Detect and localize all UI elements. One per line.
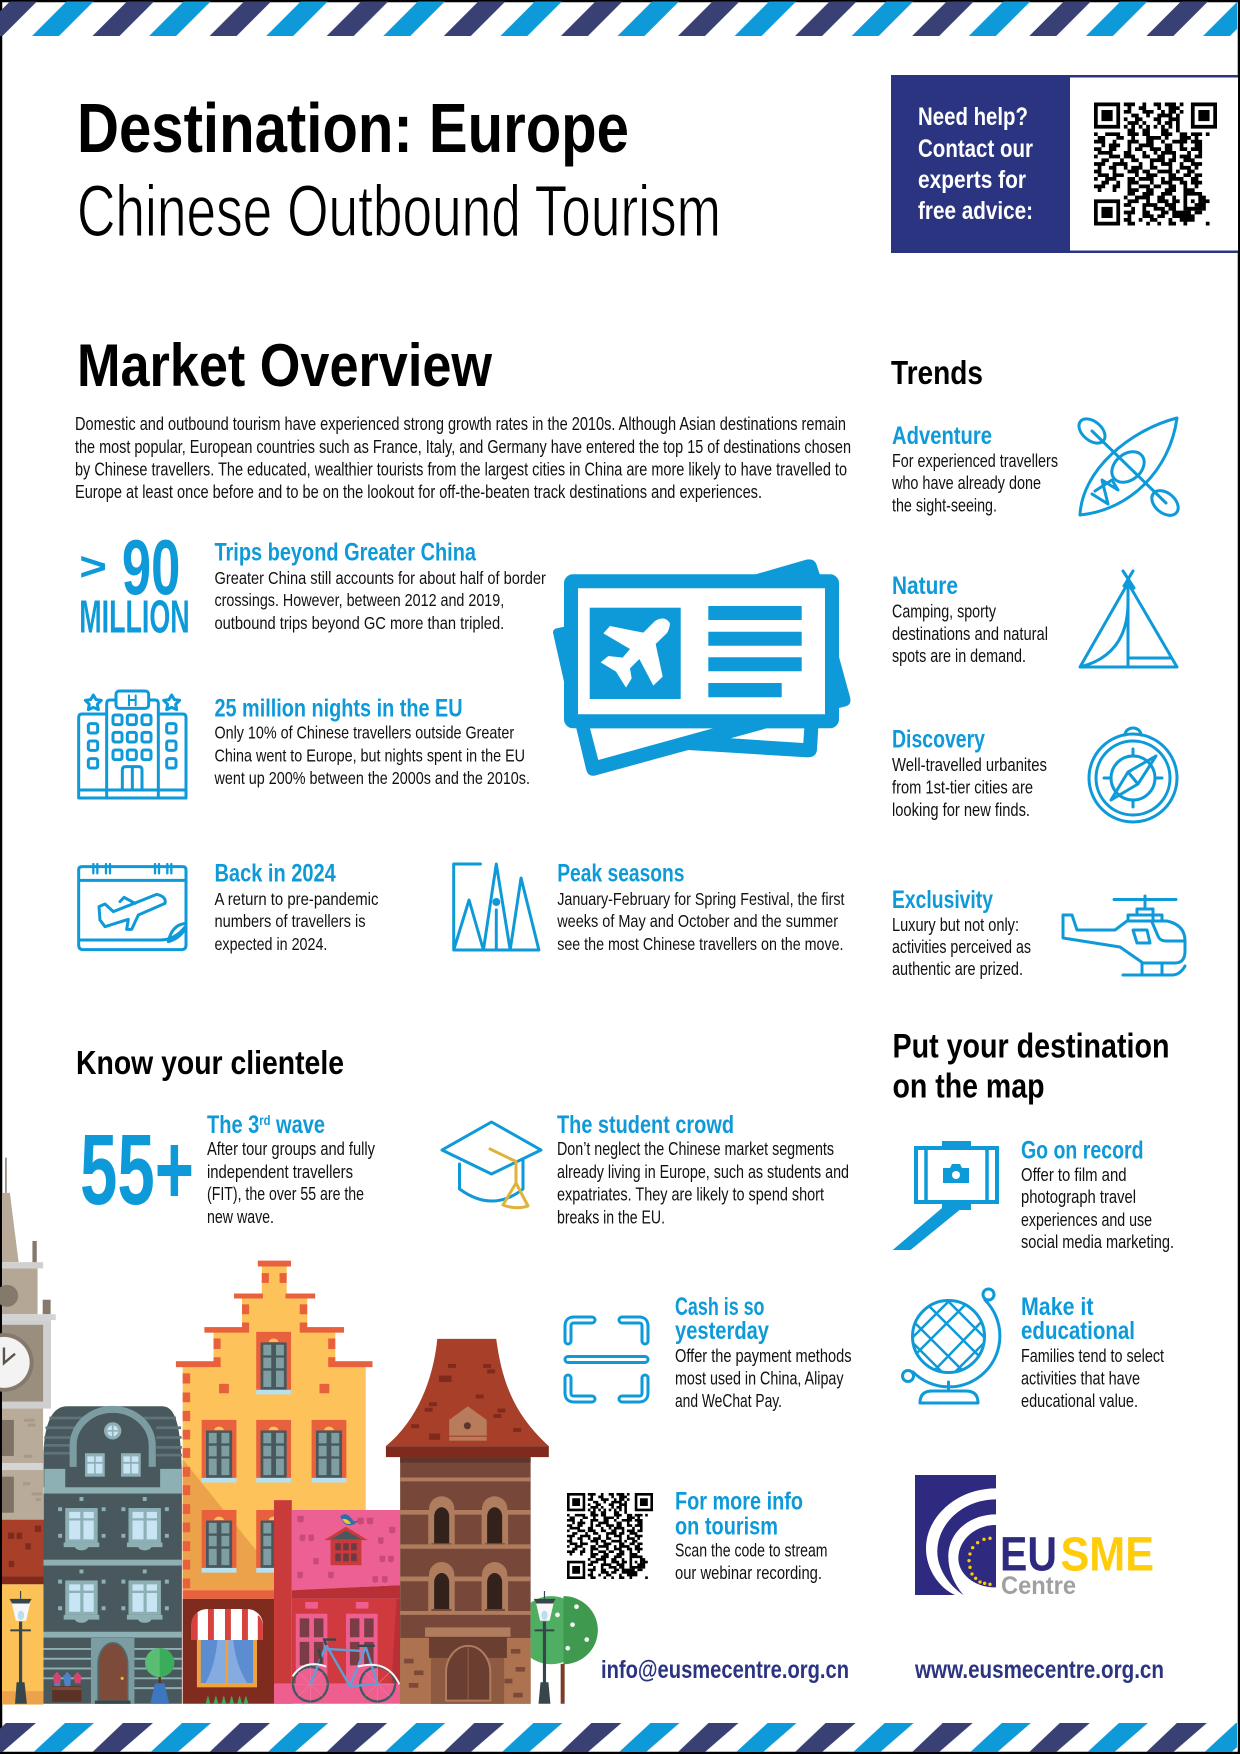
text block: 25 million nights in the EU: Only 10% of Chinese travellers outside Greater: [214, 722, 514, 743]
text block: make it educational: [1021, 1293, 1164, 1411]
title: Destination: Europe: [77, 89, 629, 167]
text block: for more info on tourism: our webinar recording.: [675, 1563, 822, 1583]
tall yellow house: [176, 1261, 372, 1704]
text block: back in 2024: Back in 2024: [214, 859, 336, 888]
airmail stripes bottom: [0, 1723, 1237, 1752]
text block: discovery: Discovery: [892, 726, 985, 754]
stat: more than 90 million: MILLION: [79, 591, 190, 643]
text block: discovery: [892, 726, 1047, 820]
text block: adventure: who have already done: [891, 473, 1041, 493]
icon: helicopter: [1063, 896, 1185, 975]
text block: 25 million nights in the EU: China went to Europe, but nights spent in the EU: [214, 745, 525, 766]
heading: market overview: Market Overview: [77, 332, 492, 399]
text block: exclusivity: authentic are prized.: [892, 959, 1023, 979]
text block: for more info on tourism: [675, 1488, 828, 1583]
text block: 25 million nights in the EU: [214, 694, 530, 788]
text block: back in 2024: expected in 2024.: [214, 934, 327, 954]
icon: graduation cap: [442, 1122, 541, 1208]
text block: the 3rd wave: (FIT), the over 55 are the: [207, 1184, 364, 1204]
text block: back in 2024: [214, 859, 378, 954]
text block: for more info on tourism: on tourism: [675, 1512, 778, 1540]
street lamp left: [9, 1591, 32, 1704]
text block: go on record: Offer to film and: [1021, 1165, 1126, 1185]
airmail stripes top: [0, 2, 1237, 36]
text block: adventure: the sight-seeing.: [892, 496, 997, 516]
text block: make it educational: educational: [1021, 1317, 1135, 1345]
text block: cash is so yesterday: Offer the payment methods: [675, 1346, 852, 1366]
contact: email: info@eusmecentre.org.cn: [601, 1656, 849, 1684]
title: Chinese Outbound Tourism: [77, 172, 721, 252]
text block: cash is so yesterday: yesterday: [675, 1317, 769, 1345]
text block: the 3rd wave: [207, 1111, 375, 1227]
text block: trips beyond greater china: Greater China still accounts for about half of border: [214, 568, 546, 588]
text block: peak seasons: January-February for Spring Festival, the first: [557, 889, 844, 909]
panel: contact help box: experts for: [918, 166, 1026, 194]
text block: 25 million nights in the EU: went up 200% between the 2000s and the 2010s.: [214, 768, 530, 788]
text block: exclusivity: [892, 886, 1031, 979]
panel: contact help box: Contact our: [918, 135, 1033, 163]
text block: go on record: [1021, 1136, 1174, 1252]
text block: the 3rd wave: The 3: [207, 1111, 272, 1139]
text block: cash is so yesterday: [675, 1293, 852, 1411]
text block: the 3rd wave: independent travellers: [207, 1162, 353, 1182]
text block: exclusivity: Luxury but not only:: [892, 915, 1019, 935]
stat: 55 plus: 55+: [80, 1114, 194, 1226]
text block: market overview intro: Domestic and outbound tourism have experienced strong growth rates in the 2010s. Although Asian destinations remain: [75, 414, 846, 434]
heading: know your clientele: Know your clientele: [76, 1044, 344, 1081]
text block: cash is so yesterday: most used in China, Alipay: [675, 1368, 844, 1388]
logo: EUSME Centre: SME: [1060, 1528, 1154, 1582]
text block: the 3rd wave: wave: [270, 1111, 325, 1139]
logo: EUSME Centre: EU: [1000, 1528, 1057, 1582]
text block: exclusivity: activities perceived as: [892, 937, 1031, 957]
text block: peak seasons: see the most Chinese travellers on the move.: [557, 934, 843, 954]
text block: adventure: [891, 422, 1058, 516]
panel: contact help box: Need help?: [918, 103, 1028, 131]
heading: put your destination on the map: [892, 1028, 1170, 1106]
text block: the student crowd: breaks in the EU.: [557, 1208, 665, 1228]
icon: globe: [902, 1289, 1000, 1403]
text block: go on record: experiences and use: [1021, 1210, 1152, 1230]
panel: contact help box: [891, 75, 1238, 253]
icon: qr payment scan: [568, 1320, 645, 1399]
bicycle: [293, 1640, 399, 1701]
text block: trips beyond greater china: [214, 538, 546, 633]
text block: exclusivity: Exclusivity: [892, 886, 993, 914]
title: [77, 89, 721, 252]
text block: cash is so yesterday: Cash is so: [675, 1293, 764, 1321]
qr code: webinar recording: [567, 1493, 653, 1579]
text block: peak seasons: [556, 859, 844, 954]
text block: make it educational: activities that have: [1021, 1368, 1140, 1388]
stat: more than 90 million: >: [79, 545, 107, 589]
panel: contact help box: free advice:: [918, 197, 1033, 225]
text block: trips beyond greater china: Trips beyond Greater China: [214, 538, 476, 567]
text block: discovery: from 1st-tier cities are: [892, 778, 1033, 798]
text block: the student crowd: The student crowd: [557, 1111, 734, 1139]
tree and street lamp right: [531, 1591, 598, 1704]
text block: trips beyond greater china: crossings. However, between 2012 and 2019,: [214, 590, 504, 610]
logo: EUSME Centre: Centre: [1001, 1572, 1076, 1600]
icon: tent: [1080, 571, 1177, 667]
text block: nature: destinations and natural: [892, 624, 1048, 644]
heading: put your destination on the map: Put your destination: [892, 1028, 1170, 1066]
text block: make it educational: Families tend to select: [1021, 1346, 1164, 1366]
text block: nature: Camping, sporty: [892, 602, 996, 622]
text block: go on record: photograph travel: [1021, 1187, 1136, 1207]
text block: the 3rd wave: After tour groups and fully: [207, 1139, 375, 1159]
text block: for more info on tourism: For more info: [675, 1488, 803, 1516]
icon: selfie stick camera: [893, 1141, 997, 1250]
text block: back in 2024: numbers of travellers is: [214, 911, 366, 931]
text block: nature: [892, 572, 1048, 666]
icon: kayak: [1074, 414, 1183, 520]
text block: the student crowd: [557, 1111, 849, 1228]
text block: market overview intro: the most popular, European countries such as France, Italy, and Germany have entered the top 15 of destinations chosen: [75, 437, 851, 457]
text block: discovery: looking for new finds.: [892, 800, 1030, 820]
illustration: european street of buildings: [0, 1158, 598, 1705]
icon: hotel: [79, 691, 186, 798]
pink and red house: [274, 1500, 400, 1704]
icon: plane tickets: [553, 559, 850, 776]
brown tower: [386, 1339, 549, 1704]
stat: more than 90 million: 90: [122, 525, 180, 611]
text block: market overview intro: by Chinese travellers. The educated, wealthier tourists from the largest cities in China are more likely to have travelled to: [75, 460, 847, 480]
text block: nature: spots are in demand.: [892, 646, 1026, 666]
text block: go on record: Go on record: [1021, 1136, 1144, 1164]
logo: EUSME Centre: [915, 1475, 1154, 1600]
text block: the 3rd wave: new wave.: [207, 1207, 274, 1227]
text block: the student crowd: expatriates. They are likely to spend short: [557, 1184, 824, 1204]
text block: adventure: For experienced travellers: [892, 451, 1058, 471]
text block: make it educational: Make it: [1021, 1293, 1094, 1321]
text block: peak seasons: weeks of May and October and the summer: [556, 911, 838, 931]
text block: 25 million nights in the EU: 25 million nights in the EU: [214, 694, 463, 723]
text block: the student crowd: Don’t neglect the Chinese market segments: [557, 1139, 834, 1159]
text block: peak seasons: Peak seasons: [557, 859, 685, 888]
heading: put your destination on the map: on the map: [892, 1068, 1044, 1106]
red and yellow corner house: [2, 1520, 43, 1705]
text block: cash is so yesterday: and WeChat Pay.: [675, 1391, 782, 1411]
heading: trends: Trends: [891, 354, 983, 391]
icon: calendar with plane: [79, 864, 186, 950]
text block: discovery: Well-travelled urbanites: [892, 755, 1047, 775]
contact: website: www.eusmecentre.org.cn: [914, 1656, 1164, 1684]
grey house: [43, 1406, 182, 1704]
text block: market overview intro: [75, 414, 851, 502]
text block: back in 2024: A return to pre-pandemic: [214, 889, 378, 909]
text block: make it educational: educational value.: [1021, 1391, 1138, 1411]
text block: adventure: Adventure: [892, 422, 992, 450]
clock tower: [0, 1158, 56, 1520]
text block: the 3rd wave: rd: [259, 1112, 270, 1128]
text block: for more info on tourism: Scan the code to stream: [675, 1540, 828, 1560]
text block: nature: Nature: [892, 572, 958, 600]
text block: go on record: social media marketing.: [1021, 1232, 1174, 1252]
text block: the student crowd: already living in Europe, such as students and: [557, 1162, 849, 1182]
icon: compass: [1089, 728, 1177, 822]
icon: peak seasons chart: [454, 864, 539, 950]
text block: trips beyond greater china: outbound trips beyond GC more than tripled.: [214, 613, 504, 633]
text block: market overview intro: Europe at least once before and to be on the lookout for off-the-beaten track destinations and experiences.: [75, 482, 762, 502]
stat: more than 90 million: [79, 525, 190, 643]
